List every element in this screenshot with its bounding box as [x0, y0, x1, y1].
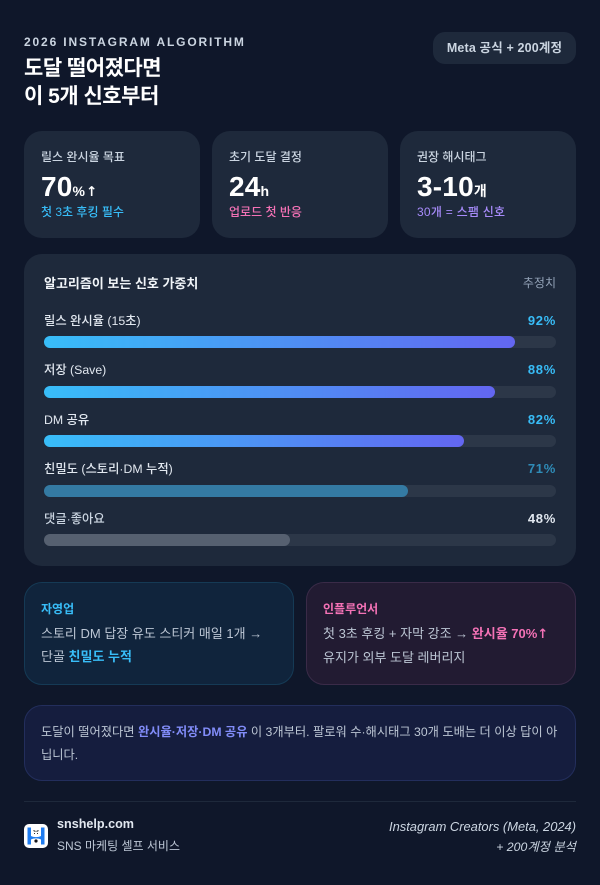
panel: influencer tip — [306, 582, 576, 685]
stat value: 3-10개 — [417, 171, 487, 202]
bar: reels completion: 릴스 완시율 (15초) — [44, 314, 141, 328]
panel: signal weights chart — [24, 254, 576, 566]
stat value: 24h — [229, 171, 269, 202]
bar: DM share: 82% — [528, 412, 556, 427]
callout text: 도달이 떨어졌다면 완시율·저장·DM 공유 이 3개부터. 팔로워 수·해시태그 30개 도배는 더 이상 답이 아 — [41, 725, 557, 739]
stat value: 70%↑ — [41, 171, 97, 202]
bar: DM share: DM 공유 — [44, 413, 89, 427]
panel: initial reach stat — [212, 131, 388, 238]
panel: small business tip — [24, 582, 294, 685]
title: 도달 떨어졌다면 — [24, 57, 161, 80]
title: 이 5개 신호부터 — [24, 85, 159, 108]
bar: comments and likes: 댓글·좋아요 — [44, 512, 105, 526]
tip body: 단골 친밀도 누적 — [41, 649, 132, 664]
stat note: 첫 3초 후킹 필수 — [41, 205, 124, 219]
source badge: Meta 공식 + 200계정 — [447, 41, 562, 55]
tip heading: 자영업 — [41, 602, 74, 616]
callout: summary — [24, 705, 576, 781]
stat label: 릴스 완시율 목표 — [41, 150, 125, 164]
eyebrow label: 2026 INSTAGRAM ALGORITHM — [24, 35, 246, 49]
tip body: 첫 3초 후킹 + 자막 강조 → 완시율 70%↑ — [323, 626, 548, 642]
callout text: 닙니다. — [41, 748, 78, 762]
bar: save: 저장 (Save) — [44, 363, 106, 377]
bar: DM share — [44, 412, 556, 447]
chart note: 추정치 — [523, 276, 556, 290]
tip heading: 인플루언서 — [323, 602, 378, 616]
bar: closeness — [44, 461, 556, 497]
footer tagline: SNS 마케팅 셀프 서비스 — [57, 839, 180, 853]
bar: reels completion: 92% — [528, 313, 556, 328]
stat label: 권장 해시태그 — [417, 150, 487, 164]
bar: comments and likes: 48% — [528, 511, 556, 526]
title — [24, 57, 161, 108]
icon: snshelp logo — [24, 824, 48, 848]
tip body: 스토리 DM 답장 유도 스티커 매일 1개 → — [41, 626, 262, 641]
bar: reels completion — [44, 313, 556, 348]
chart heading: 알고리즘이 보는 신호 가중치 — [44, 276, 198, 291]
tip body — [41, 626, 262, 664]
stat note: 30개 = 스팸 신호 — [417, 205, 505, 219]
panel: completion rate stat — [24, 131, 200, 238]
stat note: 업로드 첫 반응 — [229, 205, 302, 219]
bar: closeness: 71% — [528, 461, 556, 476]
tip body: 유지가 외부 도달 레버리지 — [323, 650, 465, 665]
panel: hashtag stat — [400, 131, 576, 238]
bar: save: 88% — [528, 362, 556, 377]
bar: comments and likes — [44, 511, 556, 546]
footer source: + 200계정 분석 — [496, 840, 576, 854]
source badge — [433, 32, 576, 64]
bar: closeness: 친밀도 (스토리·DM 누적) — [44, 462, 173, 476]
footer source: Instagram Creators (Meta, 2024) — [389, 819, 576, 834]
stat label: 초기 도달 결정 — [229, 150, 302, 164]
callout text — [41, 725, 558, 762]
tip body — [323, 626, 548, 665]
bar: save — [44, 362, 556, 398]
footer brand: snshelp.com — [57, 817, 134, 831]
footer source — [389, 819, 577, 854]
